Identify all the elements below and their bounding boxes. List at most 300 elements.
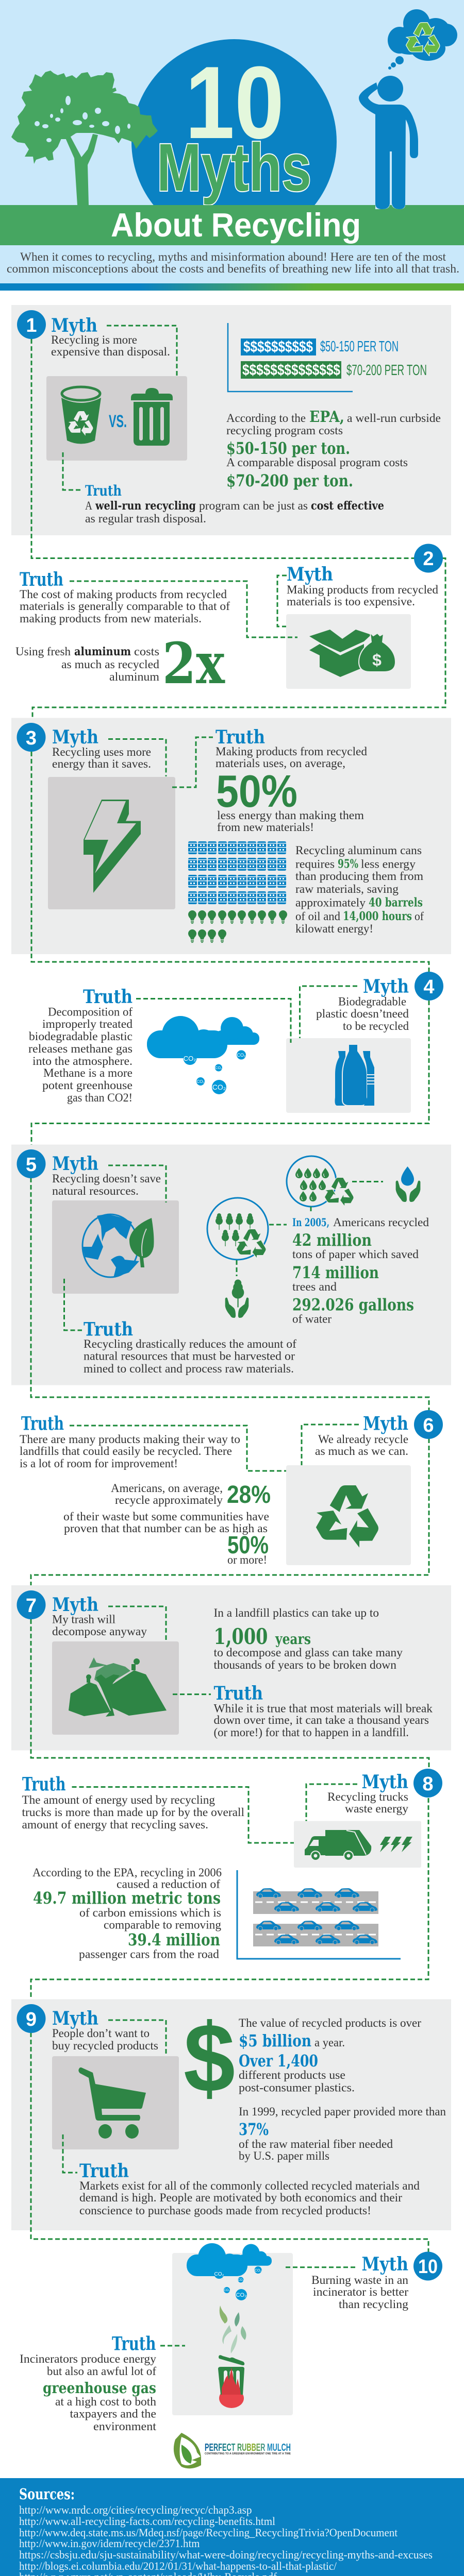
aluminum fact: costs bbox=[134, 645, 159, 658]
2005 statistics: Americans recycled bbox=[333, 1216, 429, 1229]
source links: http://www.nrdc.org/cities/recycling/recyc/chap3.asp bbox=[19, 2503, 252, 2516]
aluminum cans text bbox=[295, 844, 424, 935]
badge 2 bbox=[414, 544, 443, 573]
bar: disposal cost: $$$$$$$$$$$$$$ bbox=[242, 362, 340, 379]
EPA cost text: According to the bbox=[226, 412, 306, 425]
value statistics: different products use bbox=[239, 2069, 345, 2081]
truth 5 text: Recycling drastically reduces the amount of bbox=[84, 1337, 296, 1350]
connector: myth 8 to myth 9 bbox=[31, 1798, 428, 2005]
myth 8 text bbox=[327, 1790, 409, 1815]
image box: shopping cart bbox=[52, 2056, 179, 2149]
myth 5 text: natural resources. bbox=[52, 1184, 139, 1197]
icon: money bag: $ bbox=[372, 651, 382, 669]
aluminum cans text: approximately bbox=[295, 896, 366, 909]
truth 2 text: materials is generally comparable to that of bbox=[20, 600, 230, 613]
EPA cost text bbox=[226, 408, 441, 490]
connector: truth 6 to image bbox=[70, 1426, 291, 1471]
aluminum cans text: 95% bbox=[338, 857, 358, 871]
truth 4 text: potent greenhouse bbox=[42, 1079, 132, 1092]
image box: bottles bbox=[286, 1038, 411, 1113]
logo mark bbox=[174, 2433, 201, 2468]
myth 8 heading: Myth bbox=[362, 1771, 408, 1793]
myth 9 heading: Myth bbox=[52, 2008, 98, 2029]
source links: http://www.all-recycling-facts.com/recycling-benefits.html bbox=[19, 2515, 275, 2528]
section: myth 10 bbox=[20, 2243, 442, 2433]
2005 statistics bbox=[292, 1216, 429, 1326]
panel: myth 7 bbox=[11, 1585, 451, 1769]
landfill statistic: thousands of years to be broken down bbox=[213, 1658, 397, 1671]
badge 4: 4 bbox=[423, 976, 435, 998]
badge 5: 5 bbox=[26, 1154, 37, 1176]
aluminum fact: Using fresh bbox=[15, 645, 71, 658]
truth 9 text bbox=[79, 2179, 420, 2217]
EPA cost text: $70-200 per ton. bbox=[226, 471, 353, 490]
truth 6 text: is a lot of room for improvement! bbox=[20, 1457, 178, 1470]
EPA emissions text: 49.7 million metric tons bbox=[33, 1888, 221, 1908]
aluminum cans text: of bbox=[415, 910, 424, 923]
panel: myth 1 bbox=[11, 305, 451, 723]
badge 9: 9 bbox=[26, 2009, 37, 2030]
EPA cost text: recycling program costs bbox=[226, 424, 343, 437]
VS label: VS. bbox=[109, 412, 127, 431]
value statistics: 37% bbox=[239, 2120, 269, 2139]
icon: CO2 cloud: CO₂ bbox=[224, 2289, 230, 2292]
source links: http://blogs.ei.columbia.edu/2012/01/31/what-happens-to-all-that-plastic/ bbox=[19, 2560, 337, 2572]
badge 4 bbox=[415, 972, 443, 1001]
image box: recycling symbol bbox=[286, 1465, 411, 1565]
truth 7 text: While it is true that most materials will break bbox=[213, 1702, 433, 1715]
panel: myth 3 bbox=[11, 718, 451, 972]
connector: myth 3 to myth 4 bbox=[31, 752, 429, 972]
panel: myth 5 bbox=[11, 1145, 451, 1410]
myth 4 text bbox=[316, 995, 409, 1032]
myth 1 heading: Myth bbox=[51, 315, 97, 336]
title number 10: 10 bbox=[185, 45, 284, 160]
myth 5 text bbox=[52, 1172, 161, 1197]
truth 3 text bbox=[216, 745, 367, 770]
myth 7 text bbox=[52, 1613, 147, 1638]
image box: globe bbox=[52, 1200, 179, 1294]
aluminum fact: aluminum bbox=[109, 670, 159, 683]
icon: CO2 cloud: CO₂ bbox=[212, 1083, 226, 1091]
footer: sources bbox=[0, 2478, 464, 2576]
myth 1 text: Recycling is more bbox=[51, 333, 137, 346]
truth 2 text: making products from new materials. bbox=[20, 612, 202, 625]
EPA cost text: a well-run curbside bbox=[347, 412, 441, 425]
truth 10 text: but also an awful lot of bbox=[47, 2365, 156, 2378]
28 percent statistic: 28% bbox=[227, 1481, 271, 1509]
myth 6 text: as much as we can. bbox=[315, 1445, 408, 1458]
connector: truth 8 to image bbox=[72, 1787, 299, 1843]
28 percent statistic: recycle approximately bbox=[115, 1494, 223, 1506]
2005 statistics: 292.026 gallons bbox=[292, 1295, 414, 1315]
badge 10 bbox=[413, 2251, 442, 2280]
intro text bbox=[7, 250, 459, 275]
connector: myth 4 to image bbox=[300, 986, 357, 1044]
connector: myth to image bbox=[107, 326, 177, 383]
icon: CO2 cloud: CO₂ bbox=[214, 2272, 224, 2277]
icon: CO2 cloud: CO₂ bbox=[236, 2292, 246, 2298]
truth 1 text: A bbox=[85, 499, 92, 512]
myth 10 text: Burning waste in an bbox=[311, 2274, 409, 2286]
image box: incinerator bbox=[172, 2253, 293, 2415]
connector: image to truth bbox=[63, 452, 80, 490]
icon: plastic bottles bbox=[335, 1044, 374, 1106]
aluminum fact: aluminum bbox=[74, 645, 131, 658]
bar: recycling cost bbox=[241, 338, 399, 355]
myth 5 text: Recycling doesn’t save bbox=[52, 1172, 161, 1185]
truth 9 heading: Truth bbox=[79, 2160, 129, 2182]
truth 9 text: demand is high. People are motivated by both economics and their bbox=[79, 2191, 402, 2204]
truth 10 text: environment bbox=[93, 2420, 157, 2433]
icon: burning trash can bbox=[218, 2355, 244, 2408]
myth 1 text: expensive than disposal. bbox=[51, 345, 170, 358]
truth 1 text: well-run recycling bbox=[95, 499, 196, 513]
EPA emissions text: of carbon emissions which is bbox=[79, 1906, 221, 1919]
truth 1 text bbox=[85, 499, 384, 525]
green band bbox=[0, 205, 464, 245]
image box: trash bags bbox=[52, 1641, 179, 1735]
badge 8: 8 bbox=[422, 1773, 434, 1795]
truth 6 text: landfills that could easily be recycled. There bbox=[20, 1445, 232, 1458]
aluminum cans text: raw materials, saving bbox=[295, 883, 399, 895]
connector: image to truth 5 bbox=[64, 1279, 82, 1330]
aluminum cans text: 40 barrels bbox=[369, 895, 423, 910]
truth 4 heading: Truth bbox=[83, 986, 132, 1008]
2005 statistics: tons of paper which saved bbox=[292, 1248, 419, 1261]
28 percent statistic: Americans, on average, bbox=[111, 1482, 223, 1495]
badge 9 bbox=[16, 2004, 45, 2033]
28 percent statistic: of their waste but some communities have bbox=[63, 1510, 269, 1523]
connector: myth 7 to myth 8 bbox=[31, 1619, 429, 1769]
truth 8 text: The amount of energy used by recycling bbox=[22, 1793, 215, 1806]
icon: CO2 cloud bbox=[187, 2243, 272, 2300]
myth 3 text bbox=[52, 745, 151, 770]
connector: myth 9 to image bbox=[108, 2020, 166, 2057]
aluminum cans text: than producing them from bbox=[295, 870, 423, 883]
section: myth 2 bbox=[15, 544, 443, 697]
myth 10 text bbox=[311, 2274, 409, 2311]
connector: image to truth 9 bbox=[63, 2134, 77, 2173]
truth 3 text: materials uses, on average, bbox=[216, 757, 345, 770]
myth 7 heading: Myth bbox=[52, 1594, 98, 1616]
myth 10 heading: Myth bbox=[362, 2253, 408, 2275]
myth 6 text: We already recycle bbox=[318, 1433, 408, 1446]
intro text: common misconceptions about the costs and benefits of breathing new life into all that trash. bbox=[7, 262, 459, 275]
aluminum cans text: requires bbox=[295, 857, 335, 871]
truth 5 heading: Truth bbox=[84, 1319, 133, 1341]
bar: disposal cost bbox=[241, 361, 427, 379]
icon: recycling symbol bbox=[310, 1485, 385, 1551]
truth 5 text bbox=[84, 1337, 296, 1375]
EPA emissions text: According to the EPA, recycling in 2006 bbox=[32, 1866, 222, 1879]
aluminum fact bbox=[15, 645, 160, 683]
truth 4 text: biodegradable plastic bbox=[29, 1030, 132, 1043]
gradient divider bbox=[0, 283, 464, 291]
connector: myth 10 to image bbox=[286, 2266, 357, 2268]
badge 6: 6 bbox=[423, 1415, 434, 1436]
icon: CO2 cloud: CO₂ bbox=[215, 1066, 222, 1070]
connector: truth 10 to image bbox=[160, 2345, 185, 2346]
myth 10 text: than recycling bbox=[339, 2298, 409, 2311]
source links bbox=[19, 2503, 433, 2576]
truth 10 text: Incinerators produce energy bbox=[20, 2352, 157, 2365]
EPA cost text: $50-150 per ton. bbox=[226, 438, 350, 458]
section: myth 8 bbox=[22, 1769, 442, 2005]
truth 10 heading: Truth bbox=[112, 2333, 156, 2355]
truth 5 text: natural resources that must be harvested or bbox=[84, 1350, 295, 1362]
icon: globe and leaf bbox=[82, 1214, 154, 1278]
badge 1: 1 bbox=[26, 315, 37, 336]
section: myth 4 bbox=[28, 972, 443, 1150]
icon: CO2 cloud: CO₂ bbox=[184, 1055, 196, 1062]
aluminum cans text: kilowatt energy! bbox=[295, 922, 373, 935]
28 percent statistic: 50% bbox=[227, 1532, 269, 1559]
truth 2 text bbox=[20, 588, 230, 625]
header section bbox=[0, 0, 464, 291]
logo: Perfect Rubber Mulch bbox=[174, 2433, 291, 2468]
truth 7 text bbox=[213, 1702, 433, 1739]
landfill statistic: 1,000 bbox=[213, 1624, 268, 1649]
myth 1 text bbox=[51, 333, 170, 358]
myth 3 text: energy than it saves. bbox=[52, 757, 151, 770]
icon: dollar sign: $ bbox=[184, 2004, 235, 2113]
truth 4 text: releases methane gas bbox=[28, 1042, 132, 1055]
panel: myth 9 bbox=[11, 1999, 451, 2252]
myth 4 text: Biodegradable bbox=[338, 995, 406, 1008]
truth 7 text: (or more!) for that to happen in a landfill. bbox=[213, 1726, 409, 1739]
EPA emissions text: passenger cars from the road bbox=[79, 1948, 220, 1961]
myth 7 text: My trash will bbox=[52, 1613, 115, 1626]
myth 6 heading: Myth bbox=[363, 1413, 408, 1435]
title word Myths: Myths bbox=[157, 129, 311, 205]
truth 10 text: taxpayers and the bbox=[70, 2408, 156, 2420]
truth 3 heading: Truth bbox=[216, 726, 265, 748]
truth 6 text: There are many products making their way to bbox=[20, 1433, 240, 1446]
pictogram: barrels of oil bbox=[188, 841, 286, 904]
icon: smoke bbox=[220, 2306, 246, 2353]
EPA emissions text bbox=[32, 1866, 222, 1961]
subtitle About Recycling: About Recycling bbox=[111, 206, 361, 244]
truth 10 text: greenhouse gas bbox=[43, 2379, 156, 2397]
truth 4 text: Methane is a more bbox=[43, 1066, 132, 1079]
2005 statistics: of water bbox=[292, 1313, 332, 1326]
landfill statistic bbox=[213, 1606, 403, 1671]
icon: recycling truck bbox=[305, 1830, 371, 1860]
icon: lightning bolt bbox=[84, 800, 141, 893]
myth 5 heading: Myth bbox=[52, 1153, 98, 1175]
icon: trash bags bbox=[69, 1657, 167, 1717]
aluminum fact: as much as recycled bbox=[61, 658, 160, 671]
icon: money bag bbox=[359, 633, 395, 672]
28 percent statistic bbox=[63, 1481, 271, 1566]
value statistics: post-consumer plastics. bbox=[239, 2081, 355, 2094]
truth 2 text: The cost of making products from recycled bbox=[20, 588, 227, 601]
truth 2 heading: Truth bbox=[20, 569, 63, 590]
truth 9 text: conscience to purchase goods made from recycled products! bbox=[79, 2204, 371, 2217]
truth 10 text bbox=[20, 2352, 157, 2433]
truth 5 text: mined to collect and process raw materials. bbox=[84, 1362, 294, 1375]
myth 9 text: People don’t want to bbox=[52, 2027, 150, 2040]
aluminum cans text: less energy bbox=[361, 857, 416, 871]
myth 9 text: buy recycled products bbox=[52, 2039, 158, 2052]
connector: truth 4 to image bbox=[136, 998, 291, 1043]
big number 50 percent: 50% bbox=[216, 766, 297, 817]
myth 2 text bbox=[287, 583, 438, 608]
2005 statistics: In 2005, bbox=[292, 1216, 329, 1229]
bar: recycling cost: $$$$$$$$$$ bbox=[243, 338, 313, 355]
connector: myth 6 to image bbox=[302, 1425, 359, 1471]
truth 4 text: into the atmosphere. bbox=[32, 1055, 132, 1067]
source links: http://www.in.gov/idem/recycle/2371.htm bbox=[19, 2537, 200, 2550]
icon: recycling bin bbox=[61, 387, 101, 444]
myth 4 text: to be recycled bbox=[343, 1020, 409, 1032]
truth 8 text: trucks is more than made up for by the overall bbox=[22, 1806, 244, 1819]
icon: CO2 cloud: CO₂ bbox=[196, 1079, 205, 1084]
intro text: When it comes to recycling, myths and misinformation abound! Here are ten of the most bbox=[20, 250, 446, 263]
value statistics: The value of recycled products is over bbox=[239, 2016, 421, 2029]
badge 6 bbox=[414, 1410, 443, 1439]
image box: bins bbox=[46, 376, 187, 461]
truth 8 heading: Truth bbox=[22, 1774, 66, 1795]
badge 10: 10 bbox=[418, 2256, 438, 2278]
icon: tree bbox=[11, 71, 158, 205]
icon group: water savings bbox=[287, 1156, 420, 1211]
landfill statistic: to decompose and glass can take many bbox=[213, 1646, 403, 1659]
bar: recycling cost: $50-150 PER TON bbox=[320, 338, 399, 355]
icon: energy bolts bbox=[380, 1837, 412, 1852]
tree foliage gaps bbox=[35, 96, 130, 142]
connector: myth 4 to myth 5 bbox=[31, 1001, 429, 1150]
icon group: tree savings bbox=[207, 1198, 287, 1318]
connector: myth 8 to image bbox=[306, 1784, 357, 1827]
myth 6 text bbox=[315, 1433, 408, 1458]
source links: https://csbsju.edu/sju-sustainability/what-were-doing/recycling/recycling-myths-and-excuses bbox=[19, 2548, 433, 2561]
truth 1 heading: Truth bbox=[85, 482, 122, 499]
myth 4 heading: Myth bbox=[363, 976, 409, 997]
connector: image to truth 3 bbox=[172, 737, 213, 787]
value statistics: of the raw material fiber needed bbox=[239, 2138, 393, 2150]
sources heading: Sources: bbox=[19, 2485, 75, 2503]
connector: myth 3 to image bbox=[108, 739, 166, 776]
big number 2x: 2x bbox=[162, 630, 225, 697]
truth 4 text: improperly treated bbox=[42, 1018, 133, 1030]
logo wordmark: PERFECT RUBBER MULCH bbox=[205, 2442, 291, 2453]
truth 4 text bbox=[28, 1006, 133, 1104]
truth 3 text: Making products from recycled bbox=[216, 745, 367, 758]
connector: truth 2 to image bbox=[70, 581, 297, 637]
icon: CO2 cloud bbox=[147, 1016, 259, 1094]
value statistics: a year. bbox=[314, 2036, 345, 2049]
badge 7: 7 bbox=[26, 1595, 37, 1617]
myth 4 text: plastic doesn’tneed bbox=[316, 1007, 409, 1020]
connector: myth 2 to image bbox=[277, 575, 295, 626]
myth 9 text bbox=[52, 2027, 158, 2052]
truth 8 text bbox=[22, 1793, 244, 1831]
image box: energy bolt bbox=[48, 777, 175, 909]
28 percent statistic: proven that that number can be as high as bbox=[64, 1522, 268, 1535]
section: myth 6 bbox=[20, 1410, 443, 1591]
connector: myth 6 to myth 7 bbox=[31, 1438, 429, 1591]
icon: trash can bbox=[131, 388, 173, 446]
image box: box and money bbox=[286, 614, 411, 689]
truth 3 continued: from new materials! bbox=[217, 821, 314, 834]
connector: myth 5 to myth 6 bbox=[31, 1178, 429, 1410]
truth 10 text: at a high cost to both bbox=[55, 2395, 157, 2408]
blue circle behind title bbox=[131, 39, 337, 244]
pictogram: light bulbs bbox=[188, 910, 287, 943]
myth 10 text: incinerator is better bbox=[313, 2285, 408, 2298]
aluminum cans text: of oil and bbox=[295, 910, 340, 923]
value statistics: In 1999, recycled paper provided more than bbox=[239, 2105, 446, 2118]
EPA emissions text: comparable to removing bbox=[104, 1919, 222, 1931]
landfill statistic: In a landfill plastics can take up to bbox=[213, 1606, 379, 1619]
icon: thinking person bbox=[359, 76, 418, 209]
icon: shopping cart bbox=[78, 2067, 146, 2139]
icon: CO2 cloud: CO₂ bbox=[255, 2269, 261, 2273]
source links: http://www.deq.state.ms.us/Mdeq.nsf/page/Recycling_RecyclingTrivia?OpenDocument bbox=[19, 2526, 397, 2539]
badge 7 bbox=[16, 1590, 45, 1619]
connector: image to truth 7 bbox=[173, 1693, 211, 1695]
EPA cost text: EPA, bbox=[309, 408, 344, 426]
truth 4 text: Decomposition of bbox=[48, 1006, 132, 1018]
EPA cost text: A comparable disposal program costs bbox=[226, 456, 408, 469]
truth 1 text: as regular trash disposal. bbox=[85, 512, 206, 525]
truth 6 heading: Truth bbox=[21, 1413, 64, 1435]
truth 6 text bbox=[20, 1433, 240, 1470]
2005 statistics: 714 million bbox=[292, 1263, 379, 1282]
badge 8 bbox=[413, 1769, 442, 1798]
myth 2 heading: Myth bbox=[287, 564, 333, 585]
myth 8 text: Recycling trucks bbox=[327, 1790, 408, 1803]
28 percent statistic: or more! bbox=[227, 1553, 267, 1566]
2005 statistics: 42 million bbox=[292, 1230, 372, 1250]
logo tagline: CONTRIBUTING TO A GREENER ENVIRONMENT ONE TIRE AT A TIME bbox=[205, 2452, 291, 2455]
value statistics: Over 1,400 bbox=[239, 2051, 318, 2071]
truth 3 continued: less energy than making them bbox=[217, 809, 364, 822]
icon: thought bubble with recycling symbol bbox=[388, 9, 457, 70]
truth 1 text: program can be just as bbox=[199, 499, 308, 512]
truth 3 continued bbox=[217, 809, 364, 834]
aluminum cans text: Recycling aluminum cans bbox=[295, 844, 422, 857]
value statistics bbox=[239, 2016, 446, 2162]
connector: myth 9 to myth 10 bbox=[31, 2032, 428, 2252]
myth 7 text: decompose anyway bbox=[52, 1625, 147, 1638]
badge 5 bbox=[16, 1149, 45, 1178]
aluminum cans text: 14,000 hours bbox=[343, 909, 412, 923]
truth 7 text: down over time, it can take a thousand years bbox=[213, 1714, 429, 1726]
value statistics: by U.S. paper mills bbox=[239, 2149, 329, 2162]
badge 2: 2 bbox=[423, 548, 434, 570]
connector: myth 5 to image bbox=[108, 1165, 166, 1202]
icon: open box bbox=[309, 630, 371, 677]
badge 3 bbox=[16, 723, 45, 752]
myth 3 text: Recycling uses more bbox=[52, 745, 151, 758]
myth 8 text: waste energy bbox=[345, 1802, 409, 1815]
badge 1 bbox=[17, 310, 46, 339]
truth 9 text: Markets exist for all of the commonly collected recycled materials and bbox=[79, 2179, 420, 2192]
truth 4 text: gas than CO2! bbox=[67, 1091, 132, 1104]
connector: myth 1 to myth 2 bbox=[31, 339, 445, 723]
chart: cars on roads bbox=[237, 1870, 401, 1959]
truth 7 heading: Truth bbox=[213, 1683, 263, 1704]
icon: CO2 cloud: CO₂ bbox=[238, 2279, 244, 2282]
connector: myth 7 to image bbox=[108, 1606, 166, 1644]
image box: truck bbox=[294, 1821, 421, 1868]
myth 2 text: Making products from recycled bbox=[287, 583, 438, 596]
value statistics: $5 billion bbox=[239, 2031, 311, 2050]
EPA emissions text: caused a reduction of bbox=[117, 1877, 220, 1891]
